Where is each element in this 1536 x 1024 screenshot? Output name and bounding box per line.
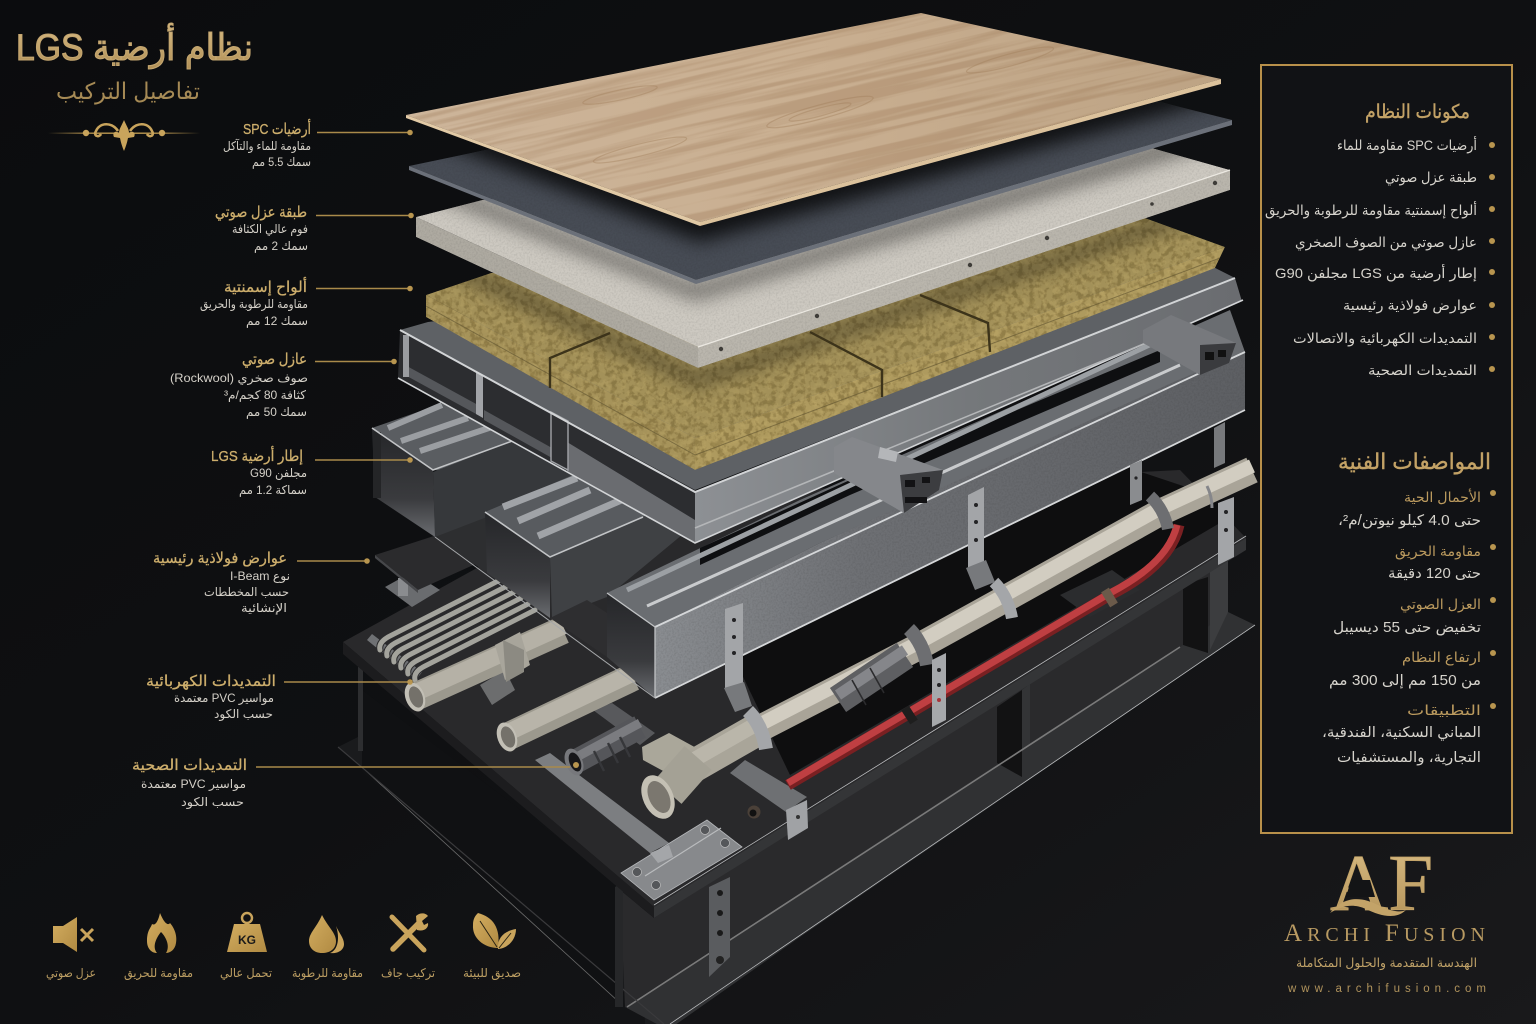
subtitle: تفاصيل التركيب xyxy=(56,78,200,105)
components list: طبقة عزل صوتي xyxy=(1385,169,1477,186)
callout: steel beams: الإنشائية xyxy=(241,601,287,615)
icon: high load: تحمل عالي xyxy=(220,966,272,980)
small black beam plate xyxy=(375,535,480,607)
callout: LGS frame xyxy=(211,446,413,497)
electrical conduit bundle xyxy=(367,580,535,680)
icon: eco friendly: صديق للبيئة xyxy=(463,966,521,981)
specs list: الأحمال الحية xyxy=(1404,488,1481,505)
callout: plumbing: حسب الكود xyxy=(181,795,244,810)
components list: عازل صوتي من الصوف الصخري xyxy=(1295,234,1477,251)
callout: cement boards xyxy=(200,277,413,328)
electrical PVC conduit xyxy=(401,626,563,714)
callout: electrical: التمديدات الكهربائية xyxy=(146,673,276,690)
plumbing PVC pipe xyxy=(493,673,633,754)
callout: rockwool: كثافة 80 كجم/م³ xyxy=(224,388,306,402)
specs list: حتى 120 دقيقة xyxy=(1388,566,1481,582)
icon: high load xyxy=(220,913,272,980)
callout: SPC flooring xyxy=(223,119,413,169)
logo: Archi Fusion: الهندسة المتقدمة والحلول المتكاملة xyxy=(1296,956,1477,971)
components list: إطار أرضية من LGS مجلفن G90 xyxy=(1275,264,1477,282)
cement board xyxy=(416,148,1230,368)
components list: أرضيات SPC مقاومة للماء xyxy=(1337,136,1477,154)
callout: SPC flooring: أرضيات SPC xyxy=(243,119,311,138)
components list xyxy=(1265,136,1495,378)
icon: moisture resistance: مقاومة للرطوبة xyxy=(292,966,363,981)
icon: high load: KG xyxy=(238,933,256,947)
callout: SPC flooring: مقاومة للماء والتآكل xyxy=(223,138,311,154)
callout: plumbing: مواسير PVC معتمدة xyxy=(141,777,246,792)
pipe clamps and hanger brackets xyxy=(724,422,1234,749)
callout: rockwool: عازل صوتي xyxy=(242,351,307,369)
callout: cement boards: مقاومة للرطوبة والحريق xyxy=(200,297,308,312)
icon row xyxy=(46,913,521,981)
red conduit pipe xyxy=(788,525,1179,785)
components list: التمديدات الكهربائية والاتصالات xyxy=(1293,330,1477,347)
callout: cement boards: سمك 12 مم xyxy=(246,314,308,328)
icon: moisture resistance xyxy=(292,915,363,981)
logo: Archi Fusion: AF xyxy=(1330,840,1433,928)
callout: rockwool: صوف صخري (Rockwool) xyxy=(170,371,308,386)
callout: steel beams xyxy=(153,550,370,615)
logo: Archi Fusion: A RCHI F USION xyxy=(1284,920,1485,947)
back left LGS channel xyxy=(372,400,610,573)
components list: ألواح إسمنتية مقاومة للرطوبة والحريق xyxy=(1265,201,1477,219)
heading: technical specs: المواصفات الفنية xyxy=(1338,449,1491,474)
SPC wood flooring xyxy=(406,13,1221,226)
heading: system components: مكونات النظام xyxy=(1365,102,1470,123)
slotted vertical plate xyxy=(709,877,730,977)
channel clip front xyxy=(834,437,943,513)
callout: acoustic layer: سمك 2 مم xyxy=(254,239,308,253)
icon: eco friendly xyxy=(463,913,521,981)
icon: sound insulation xyxy=(46,917,96,981)
front LGS channel xyxy=(435,310,1250,700)
callout: plumbing xyxy=(132,757,570,810)
ribbed grey fitting xyxy=(561,723,640,778)
specs list xyxy=(1322,488,1496,766)
middle LGS channel xyxy=(485,475,700,657)
upper LGS frame xyxy=(398,235,1243,543)
callout: acoustic layer: فوم عالي الكثافة xyxy=(232,222,308,237)
callout: rockwool: سمك 50 مم xyxy=(246,405,307,419)
callout: LGS frame: إطار أرضية LGS xyxy=(211,446,303,465)
specs list: ارتفاع النظام xyxy=(1402,649,1481,666)
icon: fire resistance: مقاومة للحريق xyxy=(124,966,193,981)
logo: Archi Fusion xyxy=(1284,840,1486,995)
callout: electrical: مواسير PVC معتمدة xyxy=(174,691,274,706)
icon: dry installation xyxy=(381,913,435,981)
icon: fire resistance xyxy=(124,913,193,981)
steel deck plate xyxy=(343,465,1246,918)
specs list: المباني السكنية، الفندقية، xyxy=(1322,725,1481,741)
specs list: العزل الصوتي xyxy=(1400,596,1481,613)
specs list: التطبيقات xyxy=(1407,702,1481,718)
title ornament xyxy=(48,120,200,151)
callout: LGS frame: سماكة 1.2 مم xyxy=(239,483,307,497)
icon: sound insulation: عزل صوتي xyxy=(46,966,96,981)
callout: rockwool xyxy=(170,351,397,419)
callout: plumbing: التمديدات الصحية xyxy=(132,757,247,774)
specs list: تخفيض حتى 55 ديسيبل xyxy=(1333,620,1481,636)
exploded floor system diagram xyxy=(338,13,1258,1024)
callout: electrical xyxy=(146,673,413,722)
main PVC drain pipe xyxy=(635,466,1252,824)
callout: cement boards: ألواح إسمنتية xyxy=(224,277,307,296)
callout: electrical: حسب الكود xyxy=(214,707,273,722)
callout: LGS frame: مجلفن G90 xyxy=(250,466,307,481)
logo: Archi Fusion: www.archifusion.com xyxy=(1287,983,1486,995)
callout: steel beams: حسب المخططات xyxy=(204,585,289,599)
specs list: من 150 مم إلى 300 مم xyxy=(1329,673,1481,689)
steel I-beam base xyxy=(338,560,1255,1024)
channel clip rear xyxy=(1143,315,1236,375)
callout: acoustic layer xyxy=(215,204,414,253)
acoustic foam layer xyxy=(409,102,1232,284)
title: نظام أرضية LGS xyxy=(16,23,253,69)
icon: dry installation: تركيب جاف xyxy=(381,966,435,981)
callout: acoustic layer: طبقة عزل صوتي xyxy=(215,204,307,222)
components list: التمديدات الصحية xyxy=(1368,362,1477,378)
specs list: التجارية، والمستشفيات xyxy=(1337,750,1481,766)
callout: steel beams: عوارض فولاذية رئيسية xyxy=(153,550,287,567)
rockwool insulation xyxy=(426,218,1225,470)
metal strips and corner bracket xyxy=(535,703,808,900)
components list: عوارض فولاذية رئيسية xyxy=(1343,297,1477,314)
callout: SPC flooring: سمك 5.5 مم xyxy=(252,155,311,169)
panel: system components and technical specs xyxy=(1261,65,1512,833)
specs list: حتى 4.0 كيلو نيوتن/م²، xyxy=(1338,513,1481,529)
specs list: مقاومة الحريق xyxy=(1395,543,1481,560)
callout: steel beams: نوع I-Beam xyxy=(230,569,290,584)
